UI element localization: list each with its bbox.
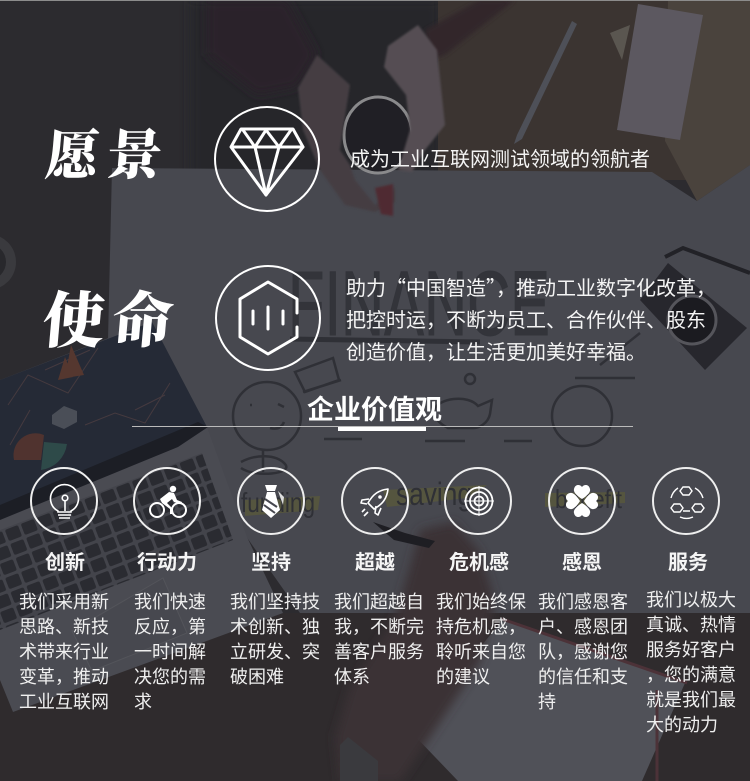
label: 感恩 [562,546,602,575]
icon: rocket [341,467,409,535]
background photo: desk with paper, laptop and notebook: benefit [555,484,623,514]
description: 我们快速 [134,588,206,614]
label: 坚持 [251,546,291,575]
description: 的信任和支 [538,663,628,689]
description: 的建议 [436,663,490,689]
notebook and hands [412,620,685,781]
description: 我们超越自 [334,588,424,614]
background photo: desk with paper, laptop and notebook: saving [396,476,472,512]
description: 我，不断完 [334,613,424,639]
label: 危机感 [449,546,509,575]
label: 超越 [355,546,395,575]
vision title: 愿景 [42,113,173,190]
description: 大的动力 [646,711,718,737]
description [538,588,628,714]
icon: necktie [237,467,305,535]
heading underline [132,426,633,431]
laptop [0,322,283,712]
description [230,588,320,689]
description: 我们以极大 [646,586,736,612]
description: 一时间解 [134,638,206,664]
icon: light bulb [30,467,98,535]
description: 善客户服务 [334,638,424,664]
description: 聆听来自您 [436,638,526,664]
description: 持危机感， [436,613,526,639]
icon: cyclist [133,467,201,535]
sketches on paper [233,333,640,474]
background photo: desk with paper, laptop and notebook: funding [241,487,315,518]
description [19,588,109,714]
description [334,588,424,689]
description: 户、感恩团 [538,613,628,639]
description: 队，感谢您 [538,638,628,664]
mission title: 使命 [40,273,186,360]
icon: three hexagons cycle [652,467,720,535]
description: 体系 [334,663,370,689]
label: 行动力 [137,546,197,575]
values heading: 企业价值观 [307,388,442,427]
description [646,586,736,737]
mission text: 创造价值，让生活更加美好幸福。 [346,336,646,365]
description: 术带来行业 [19,638,109,664]
icon: shield with voice bars [215,265,321,371]
description: 破困难 [230,663,284,689]
description: 真诚、热情 [646,611,736,637]
icon: diamond [214,106,320,212]
description: 我们始终保 [436,588,526,614]
description: 求 [134,688,152,714]
description: 我们采用新 [19,588,109,614]
icon: target [444,467,512,535]
description: 反应，第 [134,613,206,639]
description: ，您的满意 [646,661,736,687]
description: 立研发、突 [230,638,320,664]
description [436,588,526,689]
description: 术创新、独 [230,613,320,639]
mission text: 把控时运，不断为员工、合作伙伴、股东 [346,304,706,333]
description: 服务好客户 [646,636,736,662]
description: 思路、新技 [19,613,109,639]
label: 创新 [45,546,85,575]
cup and hands [344,97,412,173]
background photo: desk with paper, laptop and notebook: FINANCE [288,253,550,355]
description: 决您的需 [134,663,206,689]
mission text [346,272,716,365]
description: 持 [538,688,556,714]
description: 变革，推动 [19,663,109,689]
mission text: 助力“中国智造”，推动工业数字化改革， [346,272,716,301]
description: 工业互联网 [19,688,109,714]
description: 我们感恩客 [538,588,628,614]
description: 我们坚持技 [230,588,320,614]
vision text: 成为工业互联网测试领域的领航者 [350,143,650,172]
icon: four-leaf clover [548,467,616,535]
label: 服务 [668,546,708,575]
description [134,588,206,714]
description: 就是我们最 [646,686,736,712]
